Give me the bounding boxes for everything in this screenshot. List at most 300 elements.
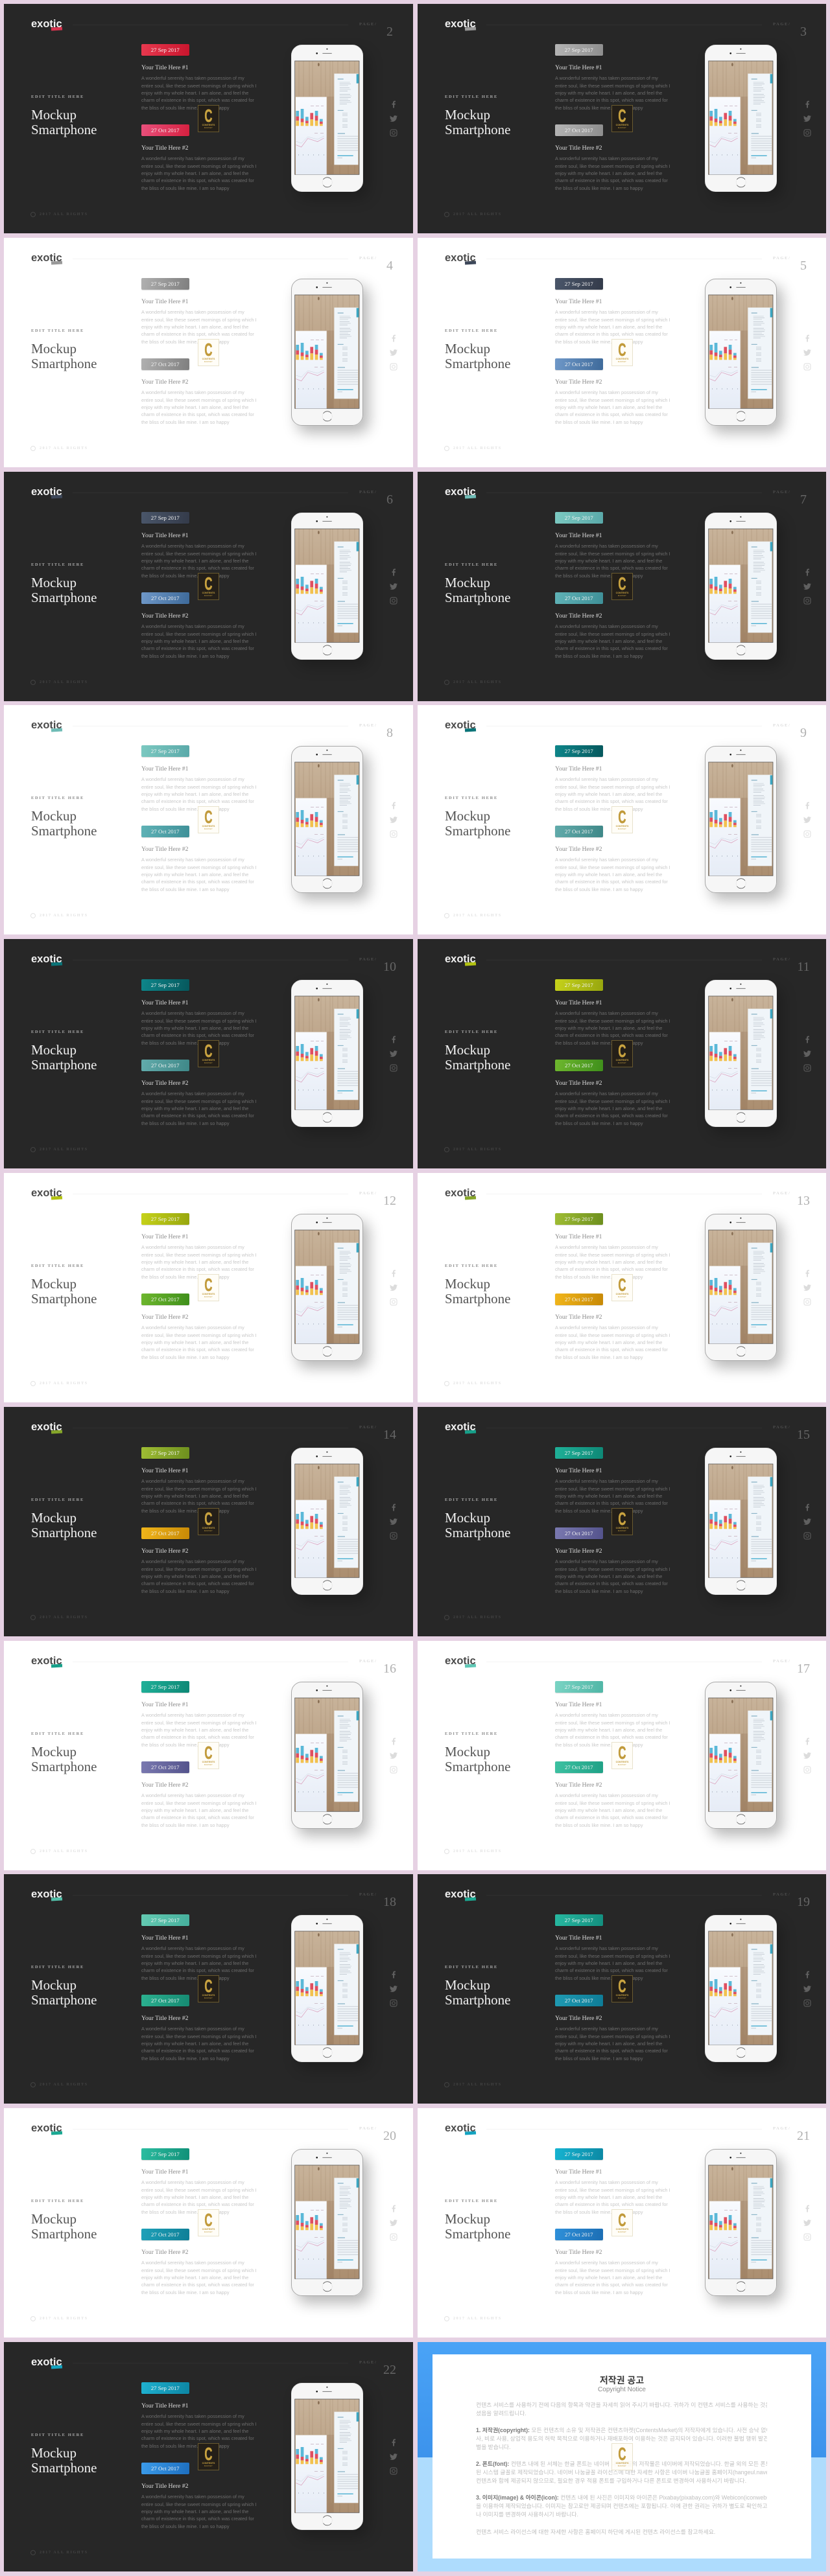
date badge 1: 27 Sep 2017 (151, 2385, 180, 2391)
item text 1: enjoy with my whole heart. I am alone, and feel the (141, 90, 248, 96)
phone mockup (705, 1681, 777, 1829)
item text 1 (555, 1478, 678, 1514)
item title 1: Your Title Here #1 (141, 765, 188, 772)
item text 1: charm of existence in this spot, which was created for (555, 798, 668, 804)
eyebrow: EDIT TITLE HERE (445, 1498, 498, 1502)
eyebrow: EDIT TITLE HERE (31, 2433, 84, 2437)
slide panel: page 14 (4, 1407, 413, 1636)
item text 2 (555, 623, 670, 659)
item text 1: A wonderful serenity has taken possession of my (141, 776, 244, 782)
footer (30, 1146, 88, 1153)
item text 2: enjoy with my whole heart. I am alone, and feel the (555, 1807, 662, 1813)
item text 1: the bliss of souls like mine. I am so happy (555, 1040, 643, 1046)
logo: exotic (31, 2356, 62, 2368)
item text 1 (555, 75, 670, 111)
date badge 2 (141, 592, 189, 604)
item text 1: entire soul, like these sweet mornings of spring which I (141, 1018, 257, 1024)
item text 2 (141, 389, 257, 425)
item text 2: enjoy with my whole heart. I am alone, and feel the (141, 2041, 248, 2047)
date badge 1: 27 Sep 2017 (151, 1450, 180, 1456)
heading (445, 106, 510, 137)
social icons (803, 1503, 811, 1542)
date badge 2: 27 Oct 2017 (151, 1530, 179, 1537)
page number: 18 (383, 1895, 396, 1909)
watermark: MARKET (618, 1764, 626, 1765)
date badge 2: 27 Oct 2017 (565, 1296, 593, 1303)
date badge 1: 27 Sep 2017 (565, 1450, 593, 1456)
page number: 6 (386, 493, 393, 507)
footer (30, 2549, 88, 2556)
date badge 1 (141, 2148, 189, 2160)
item text 1: enjoy with my whole heart. I am alone, and feel the (555, 791, 662, 797)
watermark: C (204, 106, 213, 126)
social icons (803, 569, 811, 604)
item text 2 (555, 1090, 678, 1127)
item title 1: Your Title Here #1 (141, 532, 188, 539)
slide panel: page 7 (418, 472, 826, 701)
slide panel: page 4 (4, 238, 413, 467)
heading: Mockup (31, 106, 77, 122)
heading: Smartphone (31, 1291, 97, 1306)
item text 1: A wonderful serenity has taken possession of my (555, 1478, 658, 1484)
item text 1: charm of existence in this spot, which was created for (141, 1500, 254, 1506)
watermark (198, 806, 219, 833)
item text 2: entire soul, like these sweet mornings of spring which I (141, 2268, 257, 2273)
item text 2: charm of existence in this spot, which was created for (141, 1347, 254, 1352)
phone mockup (291, 279, 363, 425)
item text 2: the bliss of souls like mine. I am so happy (141, 2290, 230, 2295)
logo: exotic (445, 719, 476, 731)
item text 1: entire soul, like these sweet mornings of spring which I (555, 1018, 670, 1024)
page label: PAGE/ (359, 1892, 377, 1897)
clause 3 (476, 2494, 767, 2518)
footer: 2017 ALL RIGHTS (453, 1148, 502, 1152)
item title 2: Your Title Here #2 (141, 378, 188, 386)
logo: exotic (445, 486, 476, 498)
footer: 2017 ALL RIGHTS (453, 914, 502, 918)
item text 2: the bliss of souls like mine. I am so happy (555, 185, 643, 191)
heading: Smartphone (31, 1992, 97, 2008)
watermark: MARKET (618, 1997, 626, 1999)
heading (445, 1745, 510, 1774)
watermark: C (618, 340, 626, 360)
slide panel: page 5 (418, 238, 826, 467)
date badge 1: 27 Sep 2017 (565, 47, 593, 53)
item text 1: entire soul, like these sweet mornings of spring which I (141, 1720, 257, 1726)
page number: 10 (383, 960, 396, 974)
slide panel: page 2 (4, 4, 413, 233)
watermark: MARKET (618, 127, 626, 128)
item text 1: the bliss of souls like mine. I am so happy (555, 1508, 643, 1514)
item title 1: Your Title Here #1 (141, 1701, 188, 1708)
item text 1 (555, 1945, 678, 1982)
item text 1: A wonderful serenity has taken possession of my (555, 75, 658, 81)
heading: Mockup (31, 1743, 77, 1759)
social icons (803, 1737, 811, 1776)
item text 1: charm of existence in this spot, which was created for (555, 1734, 668, 1740)
item text 1: enjoy with my whole heart. I am alone, and feel the (555, 558, 662, 564)
heading: Mockup (31, 2444, 77, 2460)
watermark: MARKET (618, 828, 626, 830)
item title 2: Your Title Here #2 (141, 612, 188, 620)
date badge 1 (555, 745, 603, 757)
item text 2: charm of existence in this spot, which was created for (141, 1815, 254, 1820)
item text 2: A wonderful serenity has taken possession of my (555, 857, 658, 863)
footer: 2017 ALL RIGHTS (453, 1850, 502, 1853)
item text 2: enjoy with my whole heart. I am alone, and feel the (555, 170, 662, 176)
heading: Mockup (445, 2211, 490, 2227)
social icons (803, 1970, 811, 2009)
date badge 2: 27 Oct 2017 (565, 2231, 593, 2238)
watermark: C (618, 2210, 626, 2230)
item text 1: charm of existence in this spot, which was created for (141, 1967, 254, 1973)
item text 2: charm of existence in this spot, which was created for (141, 1581, 254, 1586)
social icons (390, 2204, 397, 2243)
item text 2 (141, 1558, 265, 1595)
social icons (390, 101, 397, 136)
page number: 20 (383, 2129, 396, 2143)
eyebrow: EDIT TITLE HERE (445, 563, 498, 567)
item text 1: entire soul, like these sweet mornings of spring which I (555, 1720, 670, 1726)
social icons (390, 334, 397, 371)
item text 1: enjoy with my whole heart. I am alone, and feel the (555, 324, 662, 330)
item text 2: charm of existence in this spot, which was created for (555, 2282, 668, 2288)
page label: PAGE/ (773, 490, 790, 494)
item text 1: A wonderful serenity has taken possession of my (555, 1244, 658, 1250)
item text 2: enjoy with my whole heart. I am alone, and feel the (141, 872, 248, 877)
item text 2: the bliss of souls like mine. I am so happy (141, 2056, 230, 2061)
item text 2: enjoy with my whole heart. I am alone, and feel the (555, 638, 662, 644)
item text 1: A wonderful serenity has taken possession of my (141, 1945, 244, 1951)
date badge 1: 27 Sep 2017 (565, 982, 593, 988)
item text 2: entire soul, like these sweet mornings of spring which I (555, 1098, 670, 1104)
heading (445, 1042, 510, 1072)
eyebrow: EDIT TITLE HERE (31, 1498, 84, 1502)
date badge 1 (555, 2148, 603, 2160)
watermark: CONTENTS (616, 1527, 628, 1529)
watermark: MARKET (618, 1062, 626, 1064)
date badge 1 (141, 44, 189, 56)
item text 1: the bliss of souls like mine. I am so happy (555, 105, 643, 111)
item text 1: the bliss of souls like mine. I am so happy (555, 339, 643, 345)
date badge 1 (141, 512, 189, 524)
item text 2: the bliss of souls like mine. I am so happy (555, 887, 643, 892)
item text 2 (555, 2025, 678, 2062)
footer (30, 1380, 88, 1387)
item text 1 (555, 1010, 678, 1047)
item text 2: the bliss of souls like mine. I am so happy (555, 1120, 643, 1126)
item title 1: Your Title Here #1 (555, 64, 602, 71)
phone mockup (291, 745, 363, 893)
item text 2: entire soul, like these sweet mornings of spring which I (141, 1098, 257, 1104)
item text 1: entire soul, like these sweet mornings of spring which I (141, 1953, 257, 1959)
white notice card (432, 2354, 811, 2559)
item text 1: A wonderful serenity has taken possession of my (555, 309, 658, 315)
watermark: CONTENTS (616, 1993, 628, 1996)
heading: Smartphone (445, 823, 510, 839)
logo: exotic (445, 953, 476, 965)
watermark: CONTENTS (202, 591, 215, 594)
watermark: C (204, 340, 213, 360)
watermark: CONTENTS (616, 824, 628, 827)
watermark: CONTENTS (616, 591, 628, 594)
footer (30, 2082, 88, 2088)
item text 1: A wonderful serenity has taken possession of my (141, 1010, 244, 1016)
item text 1: the bliss of souls like mine. I am so happy (141, 1274, 230, 1280)
item text 2 (141, 1090, 265, 1127)
date badge 2 (555, 124, 603, 136)
heading (445, 809, 510, 839)
logo: exotic (31, 486, 62, 498)
item text 1: charm of existence in this spot, which was created for (141, 97, 254, 103)
phone mockup (705, 1213, 777, 1361)
clause 3: 나 이미지를 변경하여 사용하시기 바랍니다. (476, 2511, 578, 2517)
heading (445, 1277, 510, 1306)
date badge 1: 27 Sep 2017 (151, 515, 180, 521)
item text 2: the bliss of souls like mine. I am so happy (555, 653, 643, 659)
page label: PAGE/ (773, 957, 790, 962)
watermark: MARKET (204, 1062, 213, 1064)
watermark (611, 573, 633, 600)
social icons (803, 101, 811, 136)
intro paragraph: 셨음을 알려드립니다. (476, 2410, 527, 2417)
item text 1 (141, 1478, 265, 1514)
item text 2: charm of existence in this spot, which was created for (141, 2282, 254, 2288)
item text 2 (555, 1558, 678, 1595)
watermark: C (204, 1976, 213, 1996)
date badge 2 (555, 1995, 603, 2006)
watermark (611, 1508, 633, 1535)
page number: 2 (386, 25, 393, 39)
date badge 2: 27 Oct 2017 (151, 1062, 179, 1069)
date badge 2 (141, 1060, 189, 1071)
eyebrow: EDIT TITLE HERE (31, 563, 84, 567)
item text 2: entire soul, like these sweet mornings of spring which I (141, 631, 257, 637)
item text 2 (141, 857, 257, 892)
date badge 1 (141, 2382, 189, 2394)
heading: Mockup (445, 807, 490, 823)
item text 1 (555, 1244, 678, 1281)
footer (444, 1614, 502, 1621)
item text 1: enjoy with my whole heart. I am alone, and feel the (141, 1259, 248, 1265)
item text 1: entire soul, like these sweet mornings of spring which I (555, 551, 670, 557)
footer: 2017 ALL RIGHTS (453, 680, 502, 684)
watermark: MARKET (204, 1296, 213, 1297)
item text 1: charm of existence in this spot, which was created for (555, 1032, 668, 1038)
heading: Smartphone (445, 1524, 510, 1540)
date badge 1 (555, 1213, 603, 1225)
watermark: CONTENTS (616, 123, 628, 126)
date badge 2: 27 Oct 2017 (565, 828, 593, 835)
date badge 2 (141, 124, 189, 136)
item title 2: Your Title Here #2 (141, 1548, 188, 1555)
logo: exotic (445, 1421, 476, 1433)
item text 1: enjoy with my whole heart. I am alone, and feel the (555, 1727, 662, 1733)
date badge 2: 27 Oct 2017 (565, 1764, 593, 1770)
item text 2: A wonderful serenity has taken possession of my (555, 1325, 658, 1330)
item text 2: the bliss of souls like mine. I am so happy (141, 419, 230, 425)
item text 1: charm of existence in this spot, which was created for (141, 2201, 254, 2207)
watermark: CONTENTS (202, 2228, 215, 2231)
logo: exotic (31, 18, 62, 30)
item text 2: entire soul, like these sweet mornings of spring which I (555, 1800, 670, 1806)
watermark: C (618, 2444, 626, 2464)
watermark: CONTENTS (616, 1059, 628, 1062)
date badge 1 (141, 1447, 189, 1459)
item title 2: Your Title Here #2 (141, 846, 188, 853)
item text 1: entire soul, like these sweet mornings of spring which I (555, 2187, 670, 2193)
eyebrow: EDIT TITLE HERE (445, 95, 498, 99)
item text 1 (141, 1244, 265, 1281)
date badge 2: 27 Oct 2017 (565, 361, 593, 367)
page number: 8 (386, 726, 393, 740)
watermark (611, 806, 633, 833)
footer: 2017 ALL RIGHTS (40, 213, 88, 216)
date badge 1: 27 Sep 2017 (565, 515, 593, 521)
phone mockup (291, 44, 363, 192)
panel: copyright notice (418, 2342, 826, 2571)
item text 1: enjoy with my whole heart. I am alone, and feel the (555, 90, 662, 96)
item text 1: A wonderful serenity has taken possession of my (141, 2179, 244, 2185)
watermark: CONTENTS (202, 1527, 215, 1529)
watermark: C (204, 1509, 213, 1529)
watermark: CONTENTS (616, 358, 628, 360)
item text 2: entire soul, like these sweet mornings of spring which I (555, 864, 670, 870)
heading (31, 2211, 97, 2241)
watermark: MARKET (204, 1764, 213, 1765)
heading: Smartphone (445, 355, 510, 371)
item text 1: charm of existence in this spot, which was created for (141, 565, 254, 571)
watermark: MARKET (204, 360, 213, 363)
watermark: CONTENTS (202, 123, 215, 126)
date badge 1 (555, 278, 603, 290)
date badge 1: 27 Sep 2017 (151, 47, 180, 53)
footer (444, 446, 502, 451)
watermark (611, 105, 633, 132)
date badge 2 (141, 826, 189, 837)
item text 1: the bliss of souls like mine. I am so happy (141, 1508, 230, 1514)
date badge 1: 27 Sep 2017 (151, 982, 180, 988)
heading (445, 341, 510, 371)
date badge 2: 27 Oct 2017 (151, 361, 179, 367)
heading (445, 1978, 510, 2008)
closing note: 컨텐츠 서비스 라이선스에 대한 자세한 사항은 홈페이지 하단에 게시된 컨텐츠 라이선스를 참고하세요. (476, 2529, 715, 2535)
page label: PAGE/ (359, 1659, 377, 1664)
item text 2: A wonderful serenity has taken possession of my (141, 1559, 244, 1564)
footer: 2017 ALL RIGHTS (40, 680, 88, 684)
page number: 9 (800, 726, 807, 740)
item title 2: Your Title Here #2 (555, 1781, 602, 1789)
footer: 2017 ALL RIGHTS (40, 1616, 88, 1619)
item text 2: the bliss of souls like mine. I am so happy (141, 1120, 230, 1126)
heading: Smartphone (31, 1056, 97, 1072)
item title 1: Your Title Here #1 (141, 64, 188, 71)
clause 2 (476, 2460, 767, 2485)
item text 1: A wonderful serenity has taken possession of my (141, 543, 244, 549)
item title 2: Your Title Here #2 (555, 612, 602, 620)
watermark: CONTENTS (616, 2228, 628, 2231)
eyebrow: EDIT TITLE HERE (445, 1264, 498, 1268)
item text 1: A wonderful serenity has taken possession of my (141, 75, 244, 81)
page number: 3 (800, 25, 807, 39)
item text 1: enjoy with my whole heart. I am alone, and feel the (555, 1493, 662, 1499)
social icons (390, 801, 397, 840)
phone mockup (291, 980, 363, 1126)
item text 2: entire soul, like these sweet mornings of spring which I (141, 1566, 257, 1572)
eyebrow: EDIT TITLE HERE (31, 796, 84, 800)
heading: Smartphone (445, 2225, 510, 2241)
item text 2 (141, 2025, 265, 2062)
item text 1 (141, 1010, 265, 1047)
watermark: C (204, 574, 213, 594)
item text 2: enjoy with my whole heart. I am alone, and feel the (555, 2041, 662, 2047)
item text 2: entire soul, like these sweet mornings of spring which I (555, 1332, 670, 1338)
date badge 1: 27 Sep 2017 (565, 748, 593, 754)
item text 2: enjoy with my whole heart. I am alone, and feel the (141, 404, 248, 410)
page number: 12 (383, 1194, 396, 1208)
item text 1 (141, 2179, 265, 2216)
item text 1 (555, 776, 678, 813)
footer: 2017 ALL RIGHTS (453, 1616, 502, 1619)
phone mockup (291, 1681, 363, 1829)
slide panel: page 10 (4, 939, 413, 1168)
eyebrow: EDIT TITLE HERE (31, 1965, 84, 1969)
item text 2: entire soul, like these sweet mornings of spring which I (141, 1800, 257, 1806)
page number: 11 (797, 960, 810, 974)
eyebrow: EDIT TITLE HERE (445, 2199, 498, 2203)
heading (31, 1042, 97, 1072)
item text 1: enjoy with my whole heart. I am alone, and feel the (141, 324, 248, 330)
item text 2 (141, 1324, 265, 1361)
item text 2: entire soul, like these sweet mornings of spring which I (141, 2034, 257, 2039)
item title 2: Your Title Here #2 (555, 1314, 602, 1321)
watermark: CONTENTS (202, 824, 215, 827)
watermark (198, 573, 219, 600)
date badge 2: 27 Oct 2017 (151, 595, 179, 601)
footer: 2017 ALL RIGHTS (453, 447, 502, 450)
item text 1 (141, 776, 257, 812)
watermark: CONTENTS (616, 1292, 628, 1295)
date badge 1 (141, 1681, 189, 1693)
item text 2: the bliss of souls like mine. I am so happy (141, 1354, 230, 1360)
date badge 2 (141, 1995, 189, 2006)
heading: Mockup (31, 1510, 77, 1526)
date badge 2 (555, 2229, 603, 2240)
date badge 1 (555, 1914, 603, 1926)
heading: Mockup (445, 1275, 490, 1291)
item text 2: charm of existence in this spot, which was created for (555, 879, 668, 885)
item title 2: Your Title Here #2 (555, 378, 602, 386)
eyebrow: EDIT TITLE HERE (445, 1030, 498, 1034)
item title 1: Your Title Here #1 (141, 1934, 188, 1942)
watermark (198, 105, 219, 132)
item text 2: A wonderful serenity has taken possession of my (555, 1559, 658, 1564)
eyebrow: EDIT TITLE HERE (31, 1732, 84, 1736)
item text 2 (141, 623, 257, 659)
watermark (198, 2209, 219, 2236)
heading (31, 2446, 97, 2476)
item text 1: A wonderful serenity has taken possession of my (555, 1712, 658, 1718)
item title 1: Your Title Here #1 (141, 1233, 188, 1240)
item text 2: charm of existence in this spot, which was created for (555, 1815, 668, 1820)
item text 1: A wonderful serenity has taken possession of my (555, 1945, 658, 1951)
page label: PAGE/ (359, 256, 377, 261)
footer (30, 912, 88, 919)
item text 2: A wonderful serenity has taken possession of my (555, 389, 658, 395)
item text 1 (141, 1945, 265, 1982)
item text 2: entire soul, like these sweet mornings of spring which I (555, 2268, 670, 2273)
item text 2: enjoy with my whole heart. I am alone, and feel the (555, 1573, 662, 1579)
